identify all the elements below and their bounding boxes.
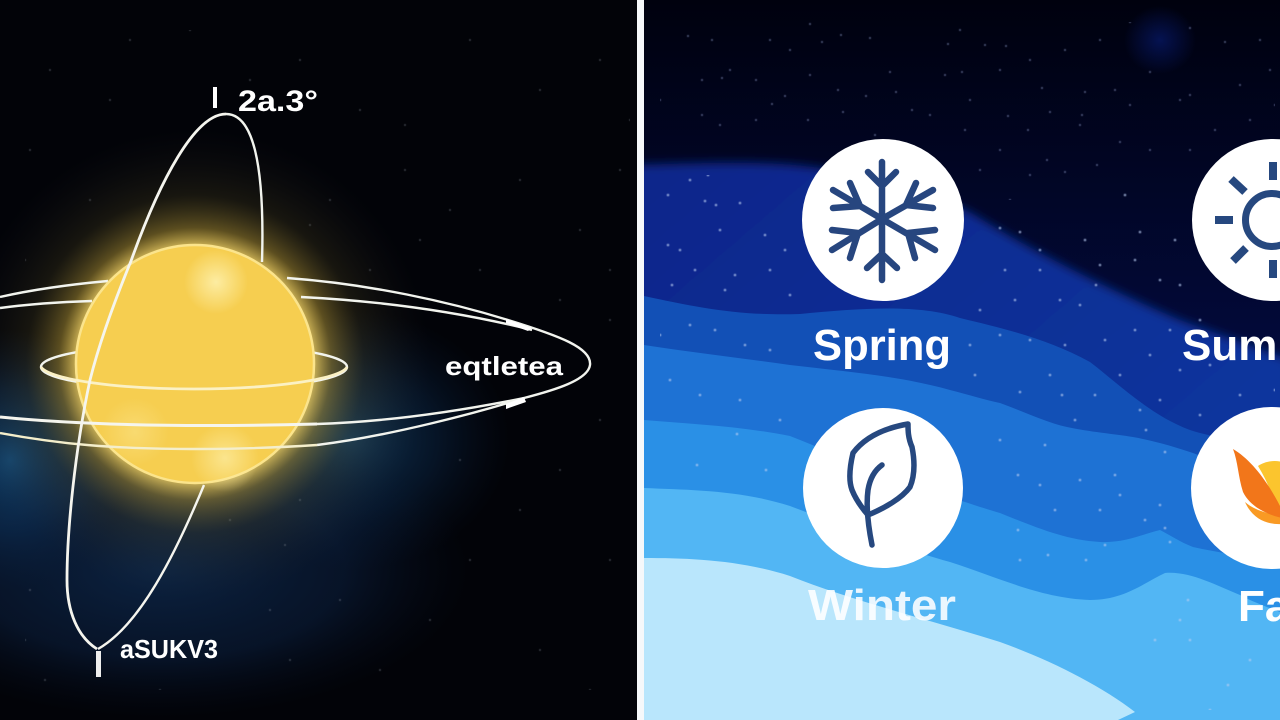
- label: equator: eqtletea: [445, 351, 564, 381]
- arrow: upper orbit marker: [506, 319, 532, 331]
- panel: seasons background: [630, 0, 1280, 720]
- label: south: aSUKV3: [120, 634, 218, 664]
- icon: autumn leaf: [1191, 407, 1280, 569]
- label: Spring: Spring: [813, 321, 951, 370]
- ground wave: [644, 558, 1135, 720]
- stars: bright lower sky: [660, 175, 1275, 710]
- tick: top axis: [213, 87, 217, 108]
- stars: dim upper sky: [660, 22, 1275, 200]
- front orbit lines: [0, 114, 347, 649]
- back orbit lines: [0, 114, 590, 445]
- sun glow: [0, 163, 395, 562]
- arrow: lower orbit marker: [506, 397, 526, 409]
- label: axis angle: 2a.3°: [238, 85, 318, 118]
- icon: leaf: [803, 408, 963, 568]
- label: Winter: Winter: [808, 581, 956, 630]
- icon: snowflake: [802, 139, 964, 301]
- sun sphere: [76, 245, 314, 492]
- panel: earth orbit diagram: [0, 0, 637, 720]
- tick: bottom axis: [96, 651, 101, 677]
- divider: [637, 0, 644, 720]
- icon: sun: [1192, 139, 1280, 301]
